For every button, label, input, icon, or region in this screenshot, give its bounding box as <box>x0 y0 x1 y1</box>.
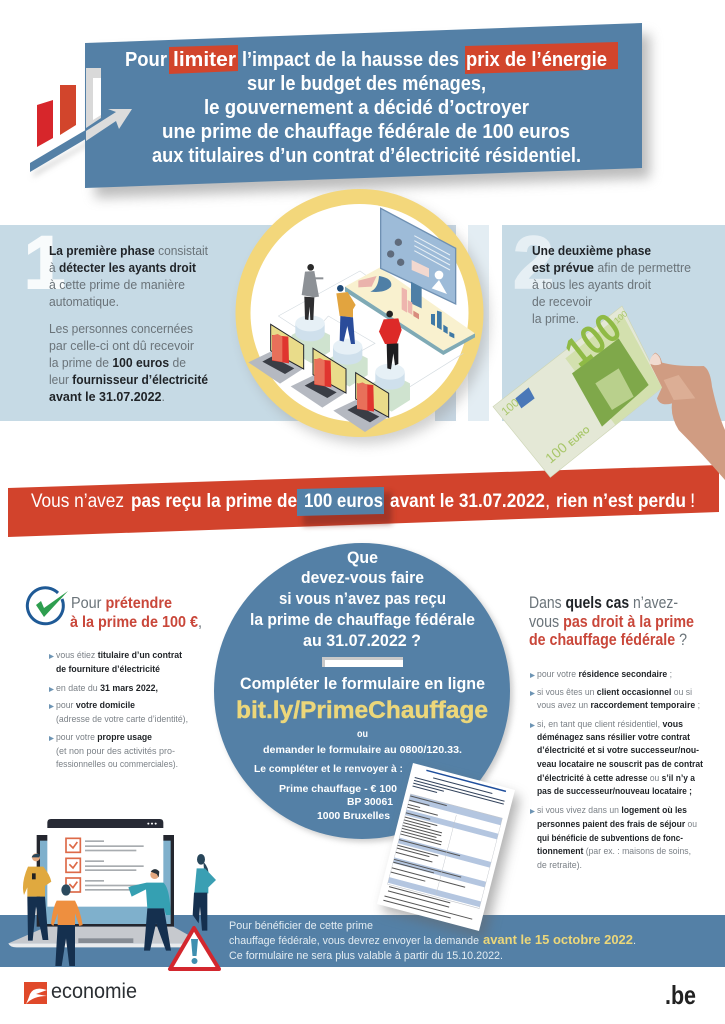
list: eligibility conditions: fessionnelles ou commerciales). <box>56 759 178 770</box>
circle question: si vous n’avez pas reçu <box>279 589 446 608</box>
title banner: limiter <box>173 49 236 71</box>
text block: phase 1: par celle-ci ont dû recevoir <box>49 339 194 353</box>
text block: phase 1: Les personnes concernées <box>49 322 193 336</box>
title banner: aux titulaires d’un contrat d’électricité résidentiel. <box>152 145 581 167</box>
title banner: prix de l’énergie <box>466 49 607 71</box>
list: exclusion cases: si vous êtes un client occasionnel ou si <box>537 687 692 698</box>
list: exclusion cases: si vous vivez dans un logement où les <box>537 805 687 816</box>
heading: exclusions: Dans quels cas n’avez- <box>529 594 678 612</box>
man in grey <box>302 264 323 320</box>
alternative and postal address: Le compléter et le renvoyer à : <box>254 763 403 775</box>
woman in red <box>379 311 402 369</box>
list: exclusion cases: pour votre résidence secondaire ; <box>537 669 672 680</box>
text block: phase 1: la prime de 100 euros de <box>49 356 186 370</box>
footer text: . <box>633 935 636 947</box>
title banner <box>85 23 650 198</box>
illustration: banknote and hand <box>493 304 725 480</box>
footer text: Pour bénéficier de cette prime <box>229 920 373 932</box>
text block: phase 2: Une deuxième phase <box>532 244 651 258</box>
list: exclusion cases: qui bénéficie de subventions de fonc- <box>537 833 683 844</box>
circle question: la prime de chauffage fédérale <box>250 610 475 629</box>
text block: phase 1: avant le 31.07.2022. <box>49 390 165 404</box>
number 1: 1 <box>24 221 65 304</box>
list: exclusion cases: tionnement (par ex. : maisons de soins, <box>537 846 691 857</box>
heading: exclusions: vous pas droit à la prime <box>529 613 694 631</box>
footer text <box>229 920 636 962</box>
text block: phase 1 <box>49 244 208 404</box>
red banner: , <box>545 491 550 512</box>
panel: phase 1 background <box>0 225 300 421</box>
heading: exclusions: de chauffage fédérale ? <box>529 631 687 649</box>
list: exclusion cases: si, en tant que client résidentiel, vous <box>537 719 683 730</box>
alternative and postal address: 1000 Bruxelles <box>317 810 390 822</box>
decorative stripes beside the circle <box>435 225 489 421</box>
list: eligibility conditions: pour votre propre usage <box>56 732 152 743</box>
list: exclusion cases: d’électricité à cette adresse ou s’il n’y a <box>537 773 696 784</box>
call to action: Compléter le formulaire en ligne <box>240 674 485 693</box>
title banner: une prime de chauffage fédérale de 100 euros <box>162 121 570 143</box>
logo: .be: .be <box>665 980 696 1010</box>
red banner: 100 euros <box>304 491 383 512</box>
list: exclusion cases: déménagez sans résilier votre contrat <box>537 732 691 743</box>
list: exclusion cases: de retraite). <box>537 860 582 871</box>
heading: eligibility <box>70 595 202 631</box>
text block: phase 2 <box>532 244 691 326</box>
person in orange <box>51 884 83 966</box>
circle question: Que <box>347 548 378 567</box>
logo: economie <box>24 980 137 1004</box>
text block: phase 1: à cette prime de manière <box>49 278 185 292</box>
list: eligibility conditions: (adresse de votre carte d’identité), <box>56 714 188 725</box>
icon: warning triangle <box>170 928 219 969</box>
circle question <box>250 548 475 650</box>
alternative and postal address: BP 30061 <box>347 796 393 808</box>
list: exclusion cases: personnes paient des frais de séjour ou <box>537 819 697 830</box>
list: exclusion cases <box>530 669 704 871</box>
illustration: laptop checklist with four people <box>8 819 216 966</box>
person in yellow <box>23 853 51 941</box>
illustration: banknote and hand: 100 <box>612 308 629 326</box>
title banner: sur le budget des ménages, <box>247 73 486 95</box>
divider bar <box>322 657 403 667</box>
red banner: Vous n’avez <box>31 491 124 512</box>
list: eligibility conditions: en date du 31 mars 2022, <box>56 683 158 694</box>
text block: phase 1: automatique. <box>49 295 119 309</box>
footer band <box>0 915 725 967</box>
person in teal <box>128 869 171 951</box>
logo: economie: economie <box>51 980 137 1003</box>
link: bit.ly/PrimeChauffage <box>236 697 488 724</box>
title banner: Pour <box>125 49 167 71</box>
alternative and postal address <box>254 728 462 822</box>
illustration: people analysing data inside yellow ring <box>236 189 489 444</box>
title banner: le gouvernement a décidé d’octroyer <box>204 97 529 119</box>
text block: phase 1: La première phase consistait <box>49 244 208 258</box>
list: eligibility conditions: vous étiez titulaire d’un contrat <box>56 650 183 661</box>
red banner: ! <box>690 491 695 512</box>
circle question: devez-vous faire <box>301 568 424 587</box>
circle question: au 31.07.2022 ? <box>303 631 421 650</box>
illustration: banknote and hand: 100 <box>542 439 570 466</box>
alternative and postal address: ou <box>357 728 368 740</box>
text block: phase 2: de recevoir <box>532 295 592 309</box>
man in yellow <box>336 285 356 344</box>
text block: phase 2: à tous les ayants droit <box>532 278 652 292</box>
text block: phase 1: leur fournisseur d’électricité <box>49 373 208 387</box>
heading: eligibility: à la prime de 100 €, <box>70 614 202 631</box>
footer text: avant le 15 octobre 2022 <box>483 933 633 947</box>
illustration: banknote and hand: EURO <box>566 424 592 448</box>
icon: green check in blue ring <box>27 588 68 624</box>
list: eligibility conditions <box>49 650 188 770</box>
central circle <box>214 543 513 842</box>
list: exclusion cases: veau locataire ne souscrit pas de contrat <box>537 759 704 770</box>
red banner <box>8 465 719 537</box>
chart icon: rising bars and arrow <box>30 85 138 178</box>
alternative and postal address: demander le formulaire au 0800/120.33. <box>263 744 462 756</box>
heading: eligibility: Pour prétendre <box>71 595 172 612</box>
list: exclusion cases: pas de successeur/nouveau locataire ; <box>537 786 692 797</box>
illustration: banknote and hand: 100 <box>556 304 630 375</box>
list: exclusion cases: d’électricité et si votre successeur/nou- <box>537 745 699 756</box>
woman in teal <box>193 854 216 931</box>
red banner: rien n’est perdu <box>556 491 686 512</box>
form document <box>377 763 520 939</box>
panel: phase 2 background <box>502 225 725 421</box>
text block: phase 2: la prime. <box>532 312 579 326</box>
red banner: avant le 31.07.2022 <box>390 491 545 512</box>
number 2: 2 <box>513 221 554 304</box>
red banner: pas reçu la prime de <box>131 491 297 512</box>
footer text: Ce formulaire ne sera plus valable à partir du 15.10.2022. <box>229 950 503 962</box>
title banner: l’impact de la hausse des <box>242 49 459 71</box>
footer text: chauffage fédérale, vous devrez envoyer la demande <box>229 935 479 947</box>
alternative and postal address: Prime chauffage - € 100 <box>279 783 397 795</box>
text block: phase 1: à détecter les ayants droit <box>49 261 197 275</box>
list: exclusion cases: vous avez un raccordement temporaire ; <box>537 700 700 711</box>
text block: phase 2: est prévue afin de permettre <box>532 261 691 275</box>
list: eligibility conditions: pour votre domicile <box>56 700 135 711</box>
list: eligibility conditions: de fourniture d’électricité <box>56 664 160 675</box>
list: eligibility conditions: (et non pour des activités pro- <box>56 746 175 757</box>
heading: exclusions <box>529 594 694 649</box>
illustration: banknote and hand: 100 <box>500 397 522 418</box>
